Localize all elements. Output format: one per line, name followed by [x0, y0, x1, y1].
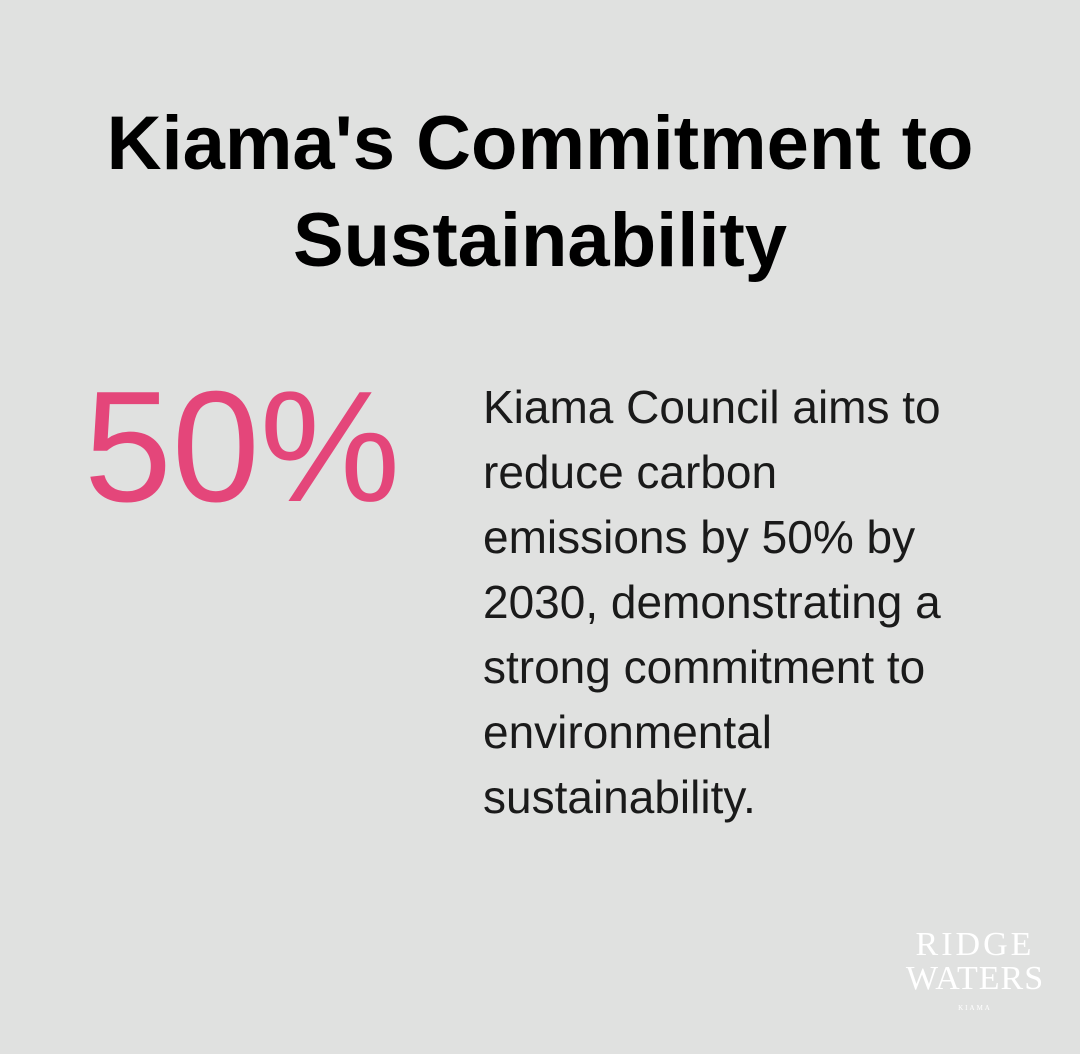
stat: 50%: 50% — [84, 359, 400, 535]
text block: description — [483, 381, 941, 823]
title: Sustainability — [293, 198, 787, 283]
text block: description: strong commitment to — [483, 641, 925, 693]
title: Kiama's Commitment to — [107, 101, 973, 186]
text block: description: sustainability. — [483, 771, 756, 823]
text block: description: reduce carbon — [483, 446, 777, 498]
text block: description: Kiama Council aims to — [483, 381, 941, 433]
logo: Ridge Waters — [906, 926, 1044, 1012]
logo: Ridge Waters: WATERS — [906, 960, 1044, 997]
text block: description: environmental — [483, 706, 772, 758]
logo: Ridge Waters: RIDGE — [916, 926, 1034, 963]
text block: description: 2030, demonstrating a — [483, 576, 941, 628]
title — [107, 101, 973, 283]
text block: description: emissions by 50% by — [483, 511, 915, 563]
logo: Ridge Waters: KIAMA — [958, 1004, 992, 1012]
